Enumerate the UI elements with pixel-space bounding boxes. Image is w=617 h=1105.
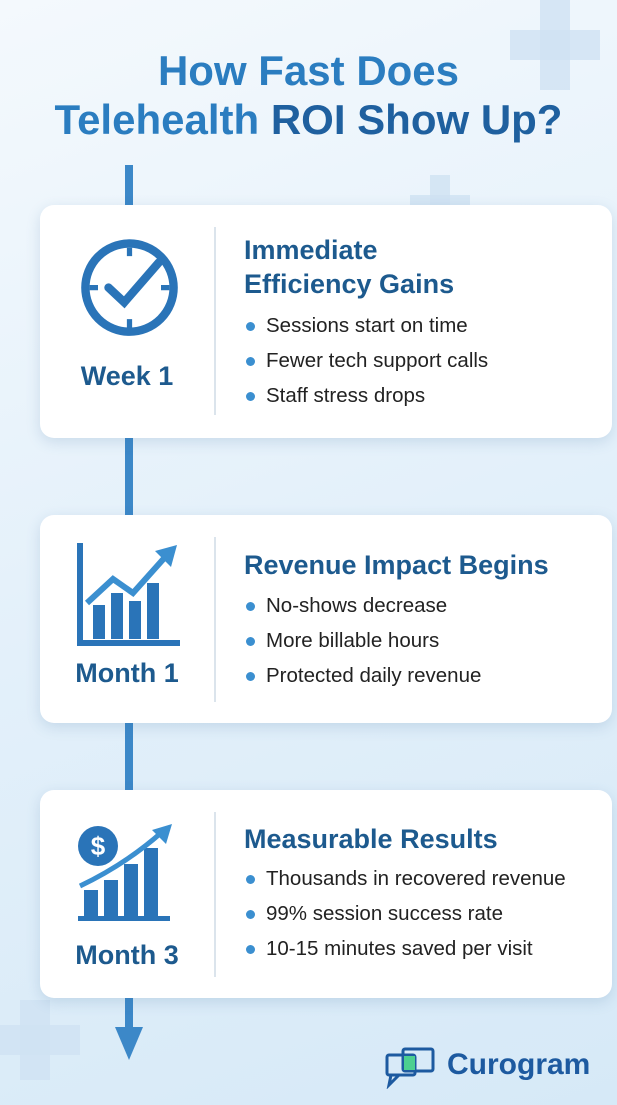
label: Month 3 xyxy=(75,940,179,970)
bullets xyxy=(246,594,481,687)
title xyxy=(54,47,562,143)
bullets xyxy=(246,314,488,407)
card: month 3 xyxy=(40,790,612,998)
label: Week 1 xyxy=(81,361,173,391)
heading: Revenue Impact Begins xyxy=(244,550,549,580)
icon: dollar growth: $ xyxy=(91,831,106,861)
heading: Efficiency Gains xyxy=(244,269,454,299)
bullets: No-shows decrease xyxy=(266,594,447,617)
title: How Fast Does xyxy=(158,47,459,94)
icon: bar chart xyxy=(77,543,180,646)
bullets: Protected daily revenue xyxy=(266,664,481,687)
icon: chat bubbles xyxy=(386,1048,434,1089)
logo: Curogram xyxy=(447,1048,590,1081)
bullets: Thousands in recovered revenue xyxy=(266,867,566,890)
bullets xyxy=(246,867,566,960)
bullets: Staff stress drops xyxy=(266,384,425,407)
heading xyxy=(244,235,454,299)
bullets: More billable hours xyxy=(266,629,439,652)
heading: Immediate xyxy=(244,235,378,265)
logo xyxy=(386,1048,590,1089)
card: week 1 xyxy=(40,205,612,438)
bullets: Sessions start on time xyxy=(266,314,468,337)
card: month 1 xyxy=(40,515,612,723)
icon: clock check xyxy=(81,239,178,336)
bullets: Fewer tech support calls xyxy=(266,349,488,372)
bullets: 99% session success rate xyxy=(266,902,503,925)
bullets: 10-15 minutes saved per visit xyxy=(266,937,533,960)
heading: Measurable Results xyxy=(244,824,498,854)
timeline arrow xyxy=(115,165,143,1060)
icon: dollar growth xyxy=(78,824,172,921)
label: Month 1 xyxy=(75,658,179,688)
title: Telehealth ROI Show Up? xyxy=(55,96,562,143)
